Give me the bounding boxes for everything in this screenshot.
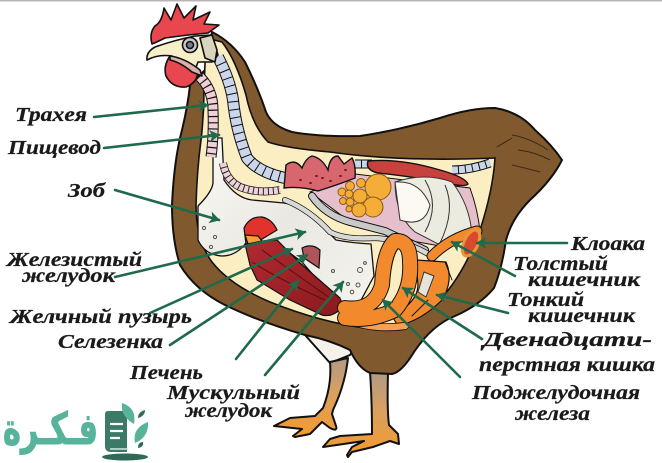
spine [218,57,490,178]
tail feather lines [497,135,550,172]
brown body [172,32,562,374]
right leg and foot [323,372,399,457]
label: large intestine: Толстый [513,253,608,275]
label: esophagus: Пищевод [7,137,101,159]
label: pancreas [471,382,640,425]
white thigh [305,335,360,363]
label: gizzard [166,382,300,422]
gray ducts [285,196,430,255]
skull [200,35,217,62]
label: large intestine: кишечник [528,269,641,291]
pink cavity [310,174,480,246]
left leg and foot [274,358,348,437]
label: proventriculus [5,249,142,287]
kidney [367,160,468,186]
chicken body [172,32,562,374]
chicken legs [274,335,399,457]
face and beak [147,35,218,70]
head [147,4,219,87]
logo icon: document with leaves [102,403,148,460]
white passage and crop [198,138,374,306]
label: proventriculus: Железистый [5,249,142,271]
label: spleen: Селезенка [58,331,163,353]
comb [151,4,219,44]
crop dots [202,226,366,294]
arrows [94,105,567,377]
logo wordmark: فـكـرة [3,404,98,455]
label: small intestine [507,289,636,327]
proventriculus [244,217,277,244]
logo [3,403,148,460]
label: gallbladder: Желчный пузырь [8,306,192,328]
label: gizzard: Мускульный [166,382,300,404]
label: cloaca: Клоака [570,233,645,255]
label: duodenum [479,329,655,376]
eye [182,38,198,52]
liver [245,240,341,316]
label: small intestine: Тонкий [507,289,584,311]
label: trachea: Трахея [15,104,87,126]
gallbladder patch [245,235,262,244]
label: large intestine [513,253,641,291]
label: duodenum: Двенадцати- [480,329,652,351]
label: pancreas: железа [514,403,590,425]
ovary yolks [338,174,391,217]
label: liver: Печень [129,362,203,384]
trachea [200,77,280,191]
spleen [302,246,320,268]
cream interior [196,38,495,328]
label: crop: Зоб [67,180,106,202]
oviduct coils [395,177,472,245]
label: pancreas: Поджелудочная [471,382,640,404]
label: duodenum: перстная кишка [479,354,655,376]
mouth [170,56,202,76]
label: small intestine: кишечник [528,305,636,327]
esophagus [223,163,280,191]
intestines [345,231,477,327]
cloaca [459,227,483,259]
label: gizzard: желудок [184,400,273,422]
label: proventriculus: желудок [21,265,116,287]
wattle [165,56,198,87]
lungs [284,156,355,191]
